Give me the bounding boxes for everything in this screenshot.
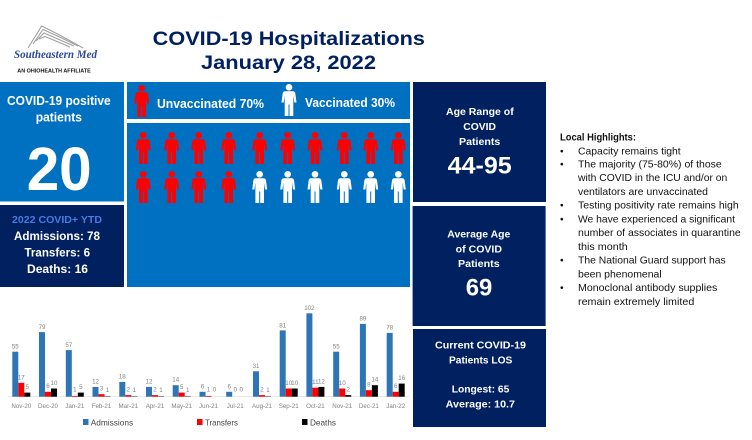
Apr-21 bars: 1: [159, 387, 163, 394]
Dec-21 bars: 8: [367, 382, 371, 389]
Dec-20 bars: [38, 324, 59, 410]
Dec-21 bars: Dec-21: [359, 403, 379, 410]
logo roof mark: [28, 26, 83, 48]
Oct-21 bars: 12: [318, 379, 325, 386]
Jun-21 bars: Jun-21: [199, 403, 219, 410]
May-21 bars: May-21: [171, 403, 193, 410]
Mar-21 bars: Mar-21: [118, 403, 139, 410]
Dec-21 bars: 14: [371, 377, 379, 384]
text block: local highlights: •: [560, 283, 564, 294]
Dec-20 bars: 79: [39, 324, 46, 331]
row 2 icons: unvaccinated: [136, 171, 236, 203]
panel: 2022 COVID+ YTD: Admissions: 78: [14, 231, 101, 243]
text block: local highlights: The National Guard support has: [578, 256, 726, 267]
May-21 bars: 14: [172, 377, 180, 384]
panel: average age: of COVID: [456, 243, 502, 255]
bar chart: monthly admissions, transfers, deaths: [8, 305, 409, 410]
panel: age range: Patients: [459, 136, 500, 148]
panel: length of stay: [413, 329, 546, 427]
Feb-21 bars: 3: [100, 386, 104, 393]
text block: local highlights: •: [560, 160, 564, 171]
Apr-21 bars: Apr-21: [146, 403, 165, 410]
Oct-21 bars: 102: [304, 305, 315, 312]
Aug-21 bars: 2: [260, 387, 264, 394]
Apr-21 bars: 2: [153, 387, 157, 394]
panel: COVID-19 positive patients: [0, 82, 124, 203]
Feb-21 bars: [92, 379, 112, 410]
Nov-20 bars: 55: [12, 344, 19, 351]
Mar-21 bars: [118, 374, 139, 410]
Apr-21 bars: 12: [146, 379, 153, 386]
Nov-21 bars: Nov-21: [332, 403, 353, 410]
May-21 bars: 1: [186, 387, 190, 394]
Jan-22 bars: Jan-22: [386, 403, 406, 410]
text block: local highlights: Testing positivity rate remains high: [578, 200, 739, 211]
text block: local highlights: number of associates in quarantine: [578, 228, 741, 239]
Aug-21 bars: 31: [253, 363, 260, 370]
text block: local highlights: Local Highlights:: [560, 133, 636, 144]
text block: local highlights: •: [560, 214, 564, 225]
text block: local highlights: with COVID in the ICU and/or on: [577, 173, 727, 184]
Jun-21 bars: 1: [207, 387, 211, 394]
Jul-21 bars: 6: [227, 384, 231, 391]
title: January 28, 2022: [201, 52, 376, 74]
Jan-21 bars: 5: [79, 384, 83, 391]
Nov-20 bars: 17: [18, 375, 25, 382]
row 1 icons: unvaccinated: [136, 132, 406, 164]
Dec-20 bars: 10: [51, 380, 58, 387]
panel: vaccination legend: Vaccinated 30%: [305, 95, 395, 110]
logo: Southeastern Med: [14, 26, 98, 74]
text block: local highlights: The majority (75-80%) of those: [578, 160, 722, 171]
chart legend: [83, 418, 336, 428]
Jul-21 bars: 0: [239, 387, 243, 394]
text block: local highlights: this month: [578, 242, 628, 253]
text block: local highlights: We have experienced a significant: [578, 214, 735, 225]
Sep-21 bars: [279, 322, 299, 410]
text block: local highlights: remain extremely limited: [578, 297, 695, 308]
panel: length of stay: Longest: 65: [452, 384, 509, 396]
Jan-21 bars: 57: [65, 342, 73, 349]
Nov-21 bars: 2: [346, 387, 350, 394]
panel: 2022 COVID+ YTD: Deaths: 16: [27, 264, 88, 276]
panel: average age: Average Age: [447, 229, 510, 241]
Feb-21 bars: 1: [106, 387, 110, 394]
panel: age range: COVID: [463, 121, 496, 133]
Sep-21 bars: 10: [285, 380, 293, 387]
Oct-21 bars: Oct-21: [306, 403, 325, 410]
panel: average age: Patients: [458, 258, 500, 270]
panel: average age: 69: [466, 275, 492, 302]
panel: vaccination legend: [127, 82, 410, 119]
Aug-21 bars: [252, 363, 273, 410]
May-21 bars: 5: [180, 384, 184, 391]
logo name: Southeastern Med: [14, 47, 98, 61]
Nov-21 bars: [332, 344, 353, 410]
panel: COVID-19 positive patients: patients: [36, 110, 82, 124]
panel: 2022 COVID+ YTD: [0, 205, 124, 287]
Jun-21 bars: 6: [201, 384, 205, 391]
Nov-20 bars: 5: [26, 384, 30, 391]
text block: local highlights: Capacity remains tight: [578, 146, 681, 157]
Jan-21 bars: Jan-21: [65, 403, 85, 410]
Mar-21 bars: 2: [127, 387, 131, 394]
text block: local highlights: been phenomenal: [578, 270, 662, 281]
Jan-22 bars: 78: [386, 325, 394, 332]
panel: length of stay: Patients LOS: [449, 354, 512, 366]
Sep-21 bars: 10: [291, 380, 299, 387]
panel: age range: [413, 82, 546, 202]
chart legend: Admissions: [91, 418, 133, 428]
panel: average age: [413, 206, 546, 326]
text block: local highlights: Monoclonal antibody supplies: [578, 283, 717, 294]
Jan-22 bars: 6: [394, 383, 398, 390]
Mar-21 bars: 18: [119, 374, 126, 381]
Jan-21 bars: [65, 342, 85, 410]
Dec-21 bars: [359, 316, 379, 410]
Jun-21 bars: 0: [213, 387, 217, 394]
panel: age range: 44-95: [448, 153, 512, 180]
Oct-21 bars: [304, 305, 325, 410]
Dec-21 bars: 89: [359, 316, 367, 323]
text block: local highlights: •: [560, 256, 564, 267]
Nov-20 bars: [11, 344, 32, 410]
Oct-21 bars: 11: [312, 379, 319, 386]
title: [153, 28, 425, 74]
Dec-20 bars: Dec-20: [38, 403, 59, 410]
title: COVID-19 Hospitalizations: [153, 28, 425, 50]
text block: local highlights: [560, 133, 741, 308]
Sep-21 bars: Sep-21: [279, 403, 299, 410]
logo tagline: AN OHIOHEALTH AFFILIATE: [17, 68, 91, 74]
Jan-22 bars: 16: [398, 375, 406, 382]
Jan-22 bars: [386, 325, 406, 410]
panel: patient pictogram: [127, 123, 410, 287]
text block: local highlights: •: [560, 146, 564, 157]
panel: COVID-19 positive patients: 20: [27, 135, 92, 203]
Aug-21 bars: 1: [266, 387, 270, 394]
Jul-21 bars: 0: [233, 387, 237, 394]
Nov-20 bars: Nov-20: [11, 403, 32, 410]
panel: 2022 COVID+ YTD: 2022 COVID+ YTD: [12, 214, 102, 226]
text block: local highlights: ventilators are unvaccinated: [578, 187, 708, 198]
Nov-21 bars: 55: [333, 344, 340, 351]
Feb-21 bars: Feb-21: [92, 403, 112, 410]
panel: age range: Age Range of: [446, 106, 514, 118]
Jul-21 bars: [226, 384, 244, 410]
Feb-21 bars: 12: [92, 379, 99, 386]
Sep-21 bars: 81: [279, 322, 287, 329]
panel: 2022 COVID+ YTD: Transfers: 6: [24, 248, 90, 260]
panel: vaccination legend: Unvaccinated 70%: [157, 96, 264, 111]
panel: length of stay: Current COVID-19: [435, 339, 526, 351]
panel: length of stay: Average: 10.7: [446, 399, 515, 411]
row 2 icons: vaccinated: [252, 171, 406, 203]
Apr-21 bars: [146, 379, 165, 410]
Jun-21 bars: [199, 384, 219, 410]
text block: local highlights: •: [560, 200, 564, 211]
panel: COVID-19 positive patients: COVID-19 positive: [7, 94, 111, 108]
chart legend: Transfers: [205, 418, 238, 428]
Aug-21 bars: Aug-21: [252, 403, 273, 410]
Nov-21 bars: 10: [339, 380, 346, 387]
Jan-21 bars: 1: [73, 387, 77, 394]
Dec-20 bars: 6: [46, 383, 50, 390]
Mar-21 bars: 1: [133, 387, 137, 394]
Jul-21 bars: Jul-21: [227, 403, 244, 410]
chart legend: Deaths: [310, 418, 336, 428]
May-21 bars: [171, 377, 193, 410]
